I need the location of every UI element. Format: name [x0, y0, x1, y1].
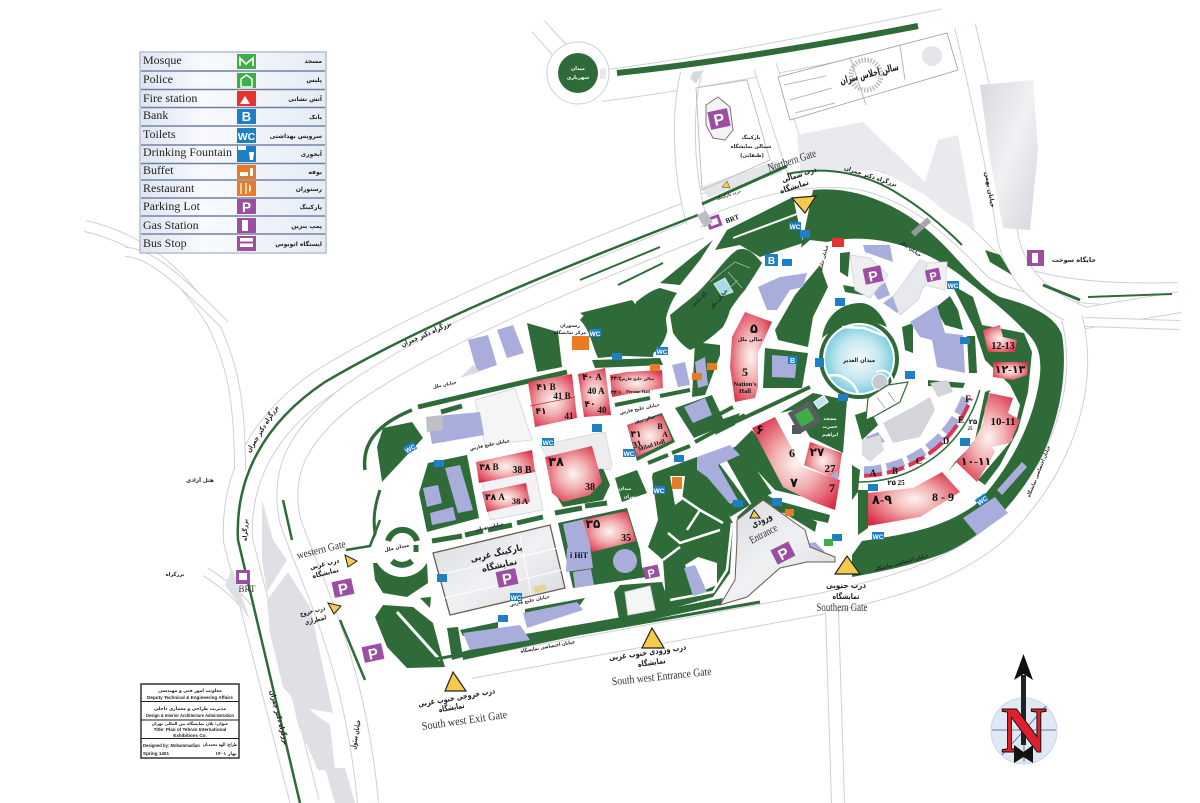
Milad hall: A	[662, 430, 668, 439]
legend: toilets: Toilets	[143, 127, 176, 141]
halls 6-7: 6	[789, 446, 795, 460]
legend: restaurant: Restaurant	[143, 181, 195, 195]
fountain and bank icons	[434, 230, 970, 622]
south west exit gate: South west Exit Gate	[421, 709, 508, 733]
entrance gate: Entrance	[748, 522, 780, 547]
purple buildings	[423, 245, 1027, 650]
legend: restaurant: رستوران	[296, 186, 323, 193]
Mellat square: میدان ملل	[384, 542, 410, 554]
north parking: شمالی نمایشگاه	[731, 143, 771, 150]
south west entrance gate	[608, 628, 712, 688]
highway green medians	[238, 26, 1172, 803]
northern gate: نمایشگاه	[778, 177, 810, 196]
road name labels: خیابان ملل	[710, 289, 729, 311]
grey land areas	[225, 70, 1038, 803]
legend: bus stop: ایستگاه اتوبوس	[275, 240, 322, 248]
Persian Gulf hall: ۴۴/۲	[611, 376, 621, 382]
legend: fire station	[143, 91, 323, 106]
halls A to F	[864, 394, 978, 487]
small parking gate: درب پارکینگ	[716, 188, 741, 201]
exhibition halls	[476, 312, 1028, 560]
halls 40: 40 A	[587, 386, 605, 396]
halls 41: 41 B	[553, 391, 571, 401]
campus interior	[740, 239, 1040, 570]
legend: parking lot	[143, 199, 322, 215]
southern gate: Southern Gate	[816, 602, 868, 614]
title block: عنوان: پلان نمایشگاه بین المللی تهران	[152, 721, 229, 726]
Persian Gulf hall: سالن خلیج فارس	[620, 376, 654, 381]
Persian Gulf hall: ۴۴/۱	[611, 390, 621, 396]
road name labels: خیابان اختصاصی نمایشگاه	[1025, 444, 1052, 498]
entrance gate: ورودی	[750, 511, 774, 531]
hall 5: سالن ملل	[738, 337, 762, 343]
halls A to F: E	[958, 415, 964, 425]
park paths	[663, 476, 732, 600]
Mellat square	[373, 519, 431, 577]
halls 12-13	[983, 325, 1028, 380]
Milad hall	[627, 414, 672, 457]
Shahriari square	[558, 53, 606, 93]
halls A to F: ۲۵	[969, 418, 978, 426]
central square: pool: میدان الغدیر	[842, 357, 875, 364]
Shahriari square: شهریاری	[567, 75, 589, 81]
halls 41	[528, 374, 577, 427]
hall 38	[545, 446, 602, 502]
green sectors around central square	[715, 252, 990, 535]
fire station and mosque icons: مسجد	[823, 417, 837, 422]
legend: bus stop	[143, 236, 322, 251]
legend	[140, 52, 326, 253]
southern gate	[816, 556, 868, 614]
road name labels: خیابان سئول	[349, 719, 363, 750]
halls A to F: D	[943, 436, 950, 446]
legend: mosque: مسجد	[304, 58, 322, 65]
hall 27	[804, 442, 842, 480]
title block: Exhibitions Co.	[173, 733, 207, 738]
hall 5: Hall	[739, 388, 751, 395]
legend: mosque	[143, 53, 322, 69]
fire station and mosque icons: حضرت	[822, 425, 838, 430]
western gate: درب غربی	[309, 556, 340, 572]
south west entrance gate: نمایشگاه	[637, 655, 666, 669]
southern gate: درب جنوبی	[826, 581, 866, 590]
legend: bank: Bank	[143, 108, 168, 122]
road name labels: بزرگراه دکتر چمران	[268, 689, 291, 746]
WC icons: WC	[948, 283, 959, 290]
WC icons: WC	[543, 440, 554, 447]
title block: Design & Interior Architecture Administration	[146, 713, 234, 718]
hall 38: 38	[585, 482, 595, 493]
green gardens north	[580, 197, 803, 358]
legend: fire station: Fire station	[143, 91, 197, 105]
hall 38A: 38 A	[512, 496, 529, 506]
halls 10-11: 10-11	[990, 416, 1016, 428]
south west exit gate: درب خروجی جنوب غربی	[417, 686, 496, 709]
fire station and mosque icons: ابراهیم	[822, 433, 838, 438]
WC icons: WC	[790, 224, 801, 231]
title block: طراح: الهه محمدیان	[203, 743, 237, 748]
south west exit gate: نمایشگاه	[438, 700, 465, 714]
title block	[141, 684, 239, 758]
legend: parking lot: P	[242, 200, 251, 215]
western gate: نمایشگاه	[311, 565, 340, 580]
gas station icon: جایگاه سوخت	[1052, 256, 1096, 264]
halls 40: 40	[598, 405, 607, 415]
road name labels: خیابان ملل	[899, 241, 922, 259]
title block: معاونت امور فنی و مهندسی	[158, 689, 222, 694]
title block: Spring 1401	[143, 751, 169, 756]
halls 6-7: 7	[829, 481, 835, 495]
legend: toilets	[143, 127, 322, 143]
WC icons: WC	[590, 331, 601, 338]
northern gate: Northern Gate	[766, 148, 818, 175]
legend: toilets: WC	[238, 131, 256, 143]
hall 27: ۲۷	[810, 445, 825, 459]
inner east garden	[952, 285, 1032, 485]
road name labels: بزرگراه دکتر چمران	[843, 164, 898, 188]
parking icons	[332, 108, 942, 665]
hall 38: ۳۸	[548, 454, 564, 469]
legend: parking lot: پارکینگ	[300, 203, 322, 211]
halls 40	[578, 368, 611, 417]
Milad hall: B	[657, 422, 663, 431]
road name labels: رستوران	[560, 324, 580, 329]
WC icons: WC	[654, 488, 665, 495]
fountain and bank icons: B	[768, 256, 775, 267]
road name labels: تهران	[624, 495, 637, 500]
hall 5: 5	[742, 365, 748, 379]
road name labels: بزرگراه	[241, 519, 249, 541]
road name labels: خیابان بهمن	[983, 171, 996, 208]
legend: drinking fountain: آبخوری	[301, 149, 323, 158]
halls 8-9: 8 - 9	[932, 490, 954, 504]
north parking: پارکینگ	[742, 134, 760, 141]
Milad hall: ۳۱	[630, 429, 642, 439]
west parking: پارکینگ غربی	[469, 541, 523, 565]
Persian Gulf hall	[610, 370, 663, 397]
WC icons: WC	[624, 451, 635, 458]
halls 6-7: ۷	[790, 475, 798, 490]
north parking: (طبقاتی)	[740, 153, 764, 159]
road name labels: خیابان خلیم	[819, 245, 830, 271]
legend: gas station: Gas Station	[143, 218, 199, 232]
northern gate: درب شمالی	[781, 165, 818, 184]
parking icons: P	[929, 270, 938, 284]
legend: toilets: سرویس بهداشتی	[270, 133, 322, 140]
legend: bank: B	[242, 109, 251, 124]
halls 41: 41	[564, 411, 574, 421]
WC icons	[403, 222, 990, 602]
halls 12-13: 12-13	[991, 341, 1015, 352]
western gate: western Gate	[296, 538, 347, 562]
halls 6-7	[752, 417, 840, 510]
title block: Deputy Technical & Engineering Affairs	[147, 695, 233, 700]
bus stops: BRT	[724, 213, 741, 225]
green campus belt	[790, 189, 1064, 577]
fire station and mosque icons	[788, 238, 844, 546]
fountain and bank icons: B	[790, 358, 795, 365]
west parking: نمایشگاه	[480, 555, 518, 575]
WC icons: WC	[404, 443, 417, 455]
road name labels: بزرگراه	[166, 571, 184, 578]
halls 40: ۴۰	[584, 399, 596, 409]
bus stops	[236, 210, 931, 594]
emergency exit gate: درب خروج	[299, 604, 327, 618]
hall 38B	[476, 450, 535, 483]
halls A to F: B	[892, 466, 898, 476]
hall 5	[730, 312, 772, 402]
title block: مدیریت طراحی و معماری داخلی	[154, 707, 226, 712]
halls 8-9	[868, 472, 960, 526]
emergency exit gate	[299, 603, 341, 627]
halls A to F: C	[916, 456, 922, 466]
southern gate: نمایشگاه	[832, 591, 860, 601]
legend: drinking fountain	[143, 145, 323, 162]
iHiT label: i HiT	[570, 551, 589, 560]
hall 38B: ۳۸ B	[479, 462, 499, 472]
title block: Title: Plan of Tehran International	[154, 727, 226, 732]
hall 35: ۳۵	[586, 517, 600, 531]
halls A to F: 25	[968, 427, 973, 432]
halls 6-7: ۶	[756, 422, 764, 437]
road name labels: خیابان خلیج فارس	[469, 439, 510, 452]
summit hall	[778, 33, 958, 120]
central square: pool	[821, 321, 908, 420]
road name labels: باغ ژاپنی	[690, 290, 709, 309]
road name labels: خیابان اختصاصی نمایشگاه	[520, 638, 576, 655]
north compass: N	[1001, 694, 1047, 767]
west parking	[433, 525, 565, 615]
WC icons: WC	[976, 495, 990, 507]
entrance gate	[748, 510, 780, 547]
WC icons: WC	[873, 534, 884, 541]
parking icons: P	[712, 111, 727, 130]
road name labels: مرکز نمایشگاه	[554, 329, 586, 336]
gas station icon	[1027, 250, 1096, 266]
parking icons: P	[367, 645, 380, 664]
legend: police	[143, 72, 322, 88]
legend: police: Police	[143, 72, 173, 86]
legend: restaurant	[143, 181, 323, 196]
halls 41: ۴۱	[536, 406, 546, 416]
entrance parking	[720, 500, 835, 605]
halls 8-9: ۸-۹	[872, 492, 892, 507]
halls 40: ۴۰ A	[582, 372, 602, 382]
Milad hall: 31	[631, 438, 643, 450]
parking icons: P	[337, 580, 350, 599]
title block: بهار ۱۴۰۱	[215, 752, 237, 757]
hall 38A	[482, 483, 530, 512]
road name labels: خیابان خلیج فارس	[509, 595, 550, 608]
gates	[296, 148, 868, 733]
legend: gas station: پمپ بنزین	[291, 223, 322, 230]
title block: Designed by: Mohammadian	[143, 743, 200, 748]
WC icons: WC	[511, 595, 522, 602]
south west entrance gate: South west Entrance Gate	[611, 666, 712, 688]
halls A to F: A	[870, 468, 877, 478]
road name labels: بزرگراه دکتر چمران	[244, 403, 280, 454]
grey paved blobs	[426, 255, 953, 615]
northern gate	[766, 148, 818, 213]
hall 35	[583, 511, 636, 552]
halls 12-13: ۱۲-۱۳	[995, 364, 1026, 376]
road name labels: خیابان تهران	[475, 522, 504, 533]
legend: drinking fountain: Drinking Fountain	[143, 145, 232, 159]
road name labels: خیابان اختصاصی نمایشگاه	[874, 552, 929, 573]
road name labels: میدان	[619, 487, 632, 492]
road name labels	[166, 164, 1052, 750]
halls 41: ۴۱ B	[536, 382, 556, 392]
road name labels: خیابان ملل	[433, 381, 457, 390]
parking icons: P	[501, 570, 514, 589]
road name labels: بزرگراه دکتر چمران	[399, 319, 453, 349]
road name labels: خیابان خلیج فارس	[619, 403, 660, 416]
Milad hall: Milad Hall	[638, 439, 666, 453]
hall 27: 27	[824, 463, 836, 475]
halls A to F: ۲۵ 25	[887, 479, 905, 487]
parking icons: P	[775, 544, 792, 564]
legend: mosque: Mosque	[143, 53, 182, 67]
legend: gas station	[143, 218, 322, 233]
parking icons: P	[867, 267, 879, 285]
hall 38A: ۳۸ A	[485, 492, 505, 502]
parking icons: P	[647, 567, 656, 581]
legend: buffet: Buffet	[143, 163, 174, 177]
Persian Gulf hall: Persian Hall	[626, 389, 651, 394]
north parking	[696, 80, 771, 190]
legend: parking lot: Parking Lot	[143, 199, 201, 213]
emergency exit gate: اضطراری	[304, 614, 327, 627]
WC icons: WC	[657, 349, 668, 356]
legend: bus stop: Bus Stop	[143, 236, 187, 250]
south west entrance gate: درب ورودی جنوب غربی	[608, 643, 687, 662]
legend: buffet: بوفه	[308, 169, 322, 176]
legend: bank: بانک	[309, 114, 322, 121]
legend: police: پلیس	[306, 77, 322, 84]
legend: buffet	[143, 163, 322, 179]
small parking gate	[716, 181, 741, 201]
hall 38B: 38 B	[512, 465, 532, 476]
Shahriari square: میدان	[571, 66, 585, 72]
road name labels: هتل آزادی	[186, 476, 214, 484]
buffet and restaurant icons	[572, 336, 794, 516]
legend: bank	[143, 108, 322, 124]
halls 10-11	[956, 393, 1020, 482]
south west exit gate	[417, 672, 508, 733]
bus stops: BRT	[239, 584, 256, 594]
legend: fire station: آتش نشانی	[288, 94, 323, 103]
green blocks west	[365, 300, 817, 668]
halls 10-11: ۱۰-۱۱	[961, 456, 991, 468]
summit hall: سالن اجلاس سران	[839, 62, 900, 87]
western gate	[296, 538, 357, 580]
hall 35: 35	[621, 533, 631, 544]
north compass	[991, 654, 1057, 767]
hall 5: Nation's	[733, 381, 757, 388]
hall 5: ۵	[750, 321, 758, 336]
halls A to F: F	[965, 394, 971, 404]
Milad hall: سالن میلاد	[634, 414, 655, 425]
